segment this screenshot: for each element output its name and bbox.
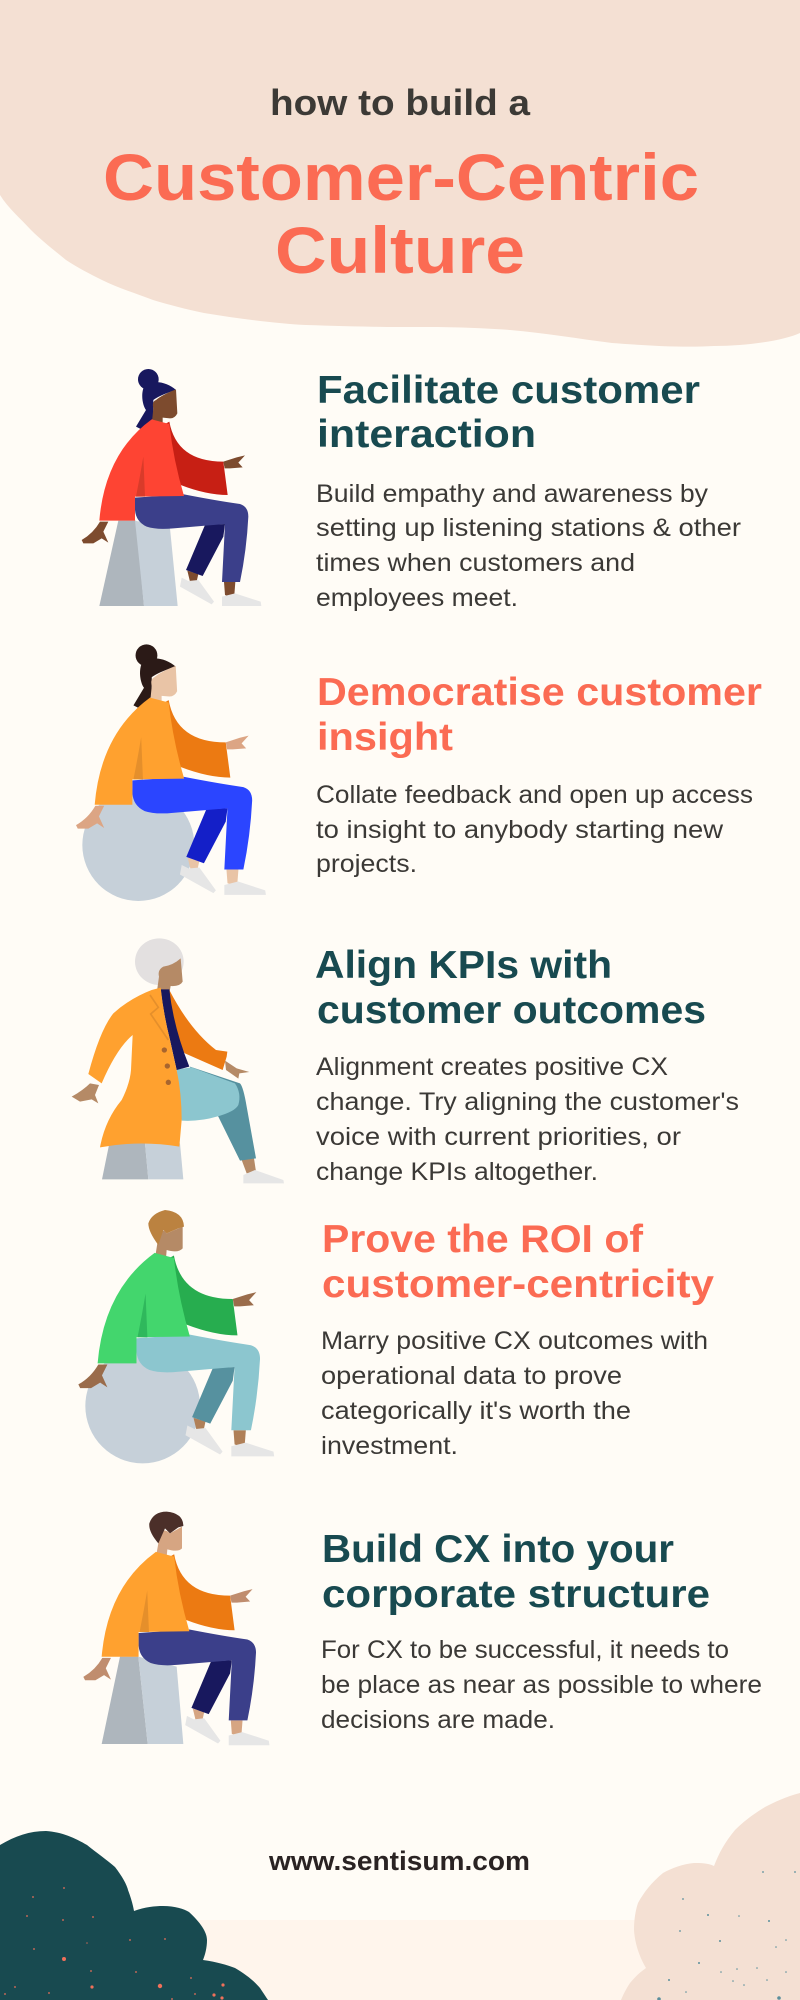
heading 2 line 1: Democratise customer: [317, 671, 762, 714]
text block 1: [316, 369, 741, 612]
body 3 line 3: voice with current priorities, or: [316, 1123, 681, 1151]
header blob: [0, 0, 800, 347]
heading 3 line 1: Align KPIs with: [315, 944, 612, 987]
heading 1 line 2: interaction: [317, 413, 536, 456]
text block 2: [316, 671, 762, 878]
subtitle: how to build a: [270, 82, 531, 123]
bottom-right peach blob: [621, 1793, 800, 2000]
text block 3: [315, 944, 739, 1186]
website footer: www.sentisum.com: [268, 1846, 530, 1876]
heading 3 line 2: customer outcomes: [317, 989, 706, 1032]
body 3 line 4: change KPIs altogether.: [316, 1158, 598, 1186]
figure 5: man in orange on stool: [83, 1512, 269, 1745]
figure 3: older woman in coat on stool: [72, 938, 284, 1183]
body 1 line 3: times when customers and: [316, 549, 635, 577]
heading 1 line 1: Facilitate customer: [317, 369, 700, 412]
heading 4 line 1: Prove the ROI of: [322, 1218, 644, 1261]
body 1 line 4: employees meet.: [316, 584, 518, 612]
title: [103, 82, 699, 287]
body 5 line 3: decisions are made.: [321, 1706, 555, 1734]
title line 2: Culture: [275, 213, 525, 287]
bottom-left dark blob: [0, 1831, 268, 2000]
body 5 line 1: For CX to be successful, it needs to: [321, 1636, 729, 1664]
body 1 line 1: Build empathy and awareness by: [316, 480, 709, 508]
figure 2: woman in orange on ball: [76, 644, 266, 901]
figure 1: woman in red on stool: [82, 369, 261, 606]
body 4 line 4: investment.: [321, 1432, 458, 1460]
body 4 line 2: operational data to prove: [321, 1362, 622, 1390]
text block 4: [321, 1218, 714, 1460]
heading 5 line 1: Build CX into your: [322, 1528, 674, 1571]
heading 5 line 2: corporate structure: [322, 1573, 710, 1616]
body 2 line 3: projects.: [316, 850, 417, 878]
body 4 line 1: Marry positive CX outcomes with: [321, 1327, 708, 1355]
heading 2 line 2: insight: [317, 716, 453, 759]
body 3 line 2: change. Try aligning the customer's: [316, 1088, 739, 1116]
body 5 line 2: be place as near as possible to where: [321, 1671, 762, 1699]
body 2 line 1: Collate feedback and open up access: [316, 781, 753, 809]
heading 4 line 2: customer-centricity: [322, 1263, 714, 1306]
body 2 line 2: to insight to anybody starting new: [316, 816, 724, 844]
title line 1: Customer-Centric: [103, 140, 699, 214]
body 1 line 2: setting up listening stations & other: [316, 514, 741, 542]
figure 4: man in green on ball: [78, 1210, 274, 1463]
body 4 line 3: categorically it's worth the: [321, 1397, 631, 1425]
text block 5: [321, 1528, 762, 1734]
body 3 line 1: Alignment creates positive CX: [316, 1053, 668, 1081]
